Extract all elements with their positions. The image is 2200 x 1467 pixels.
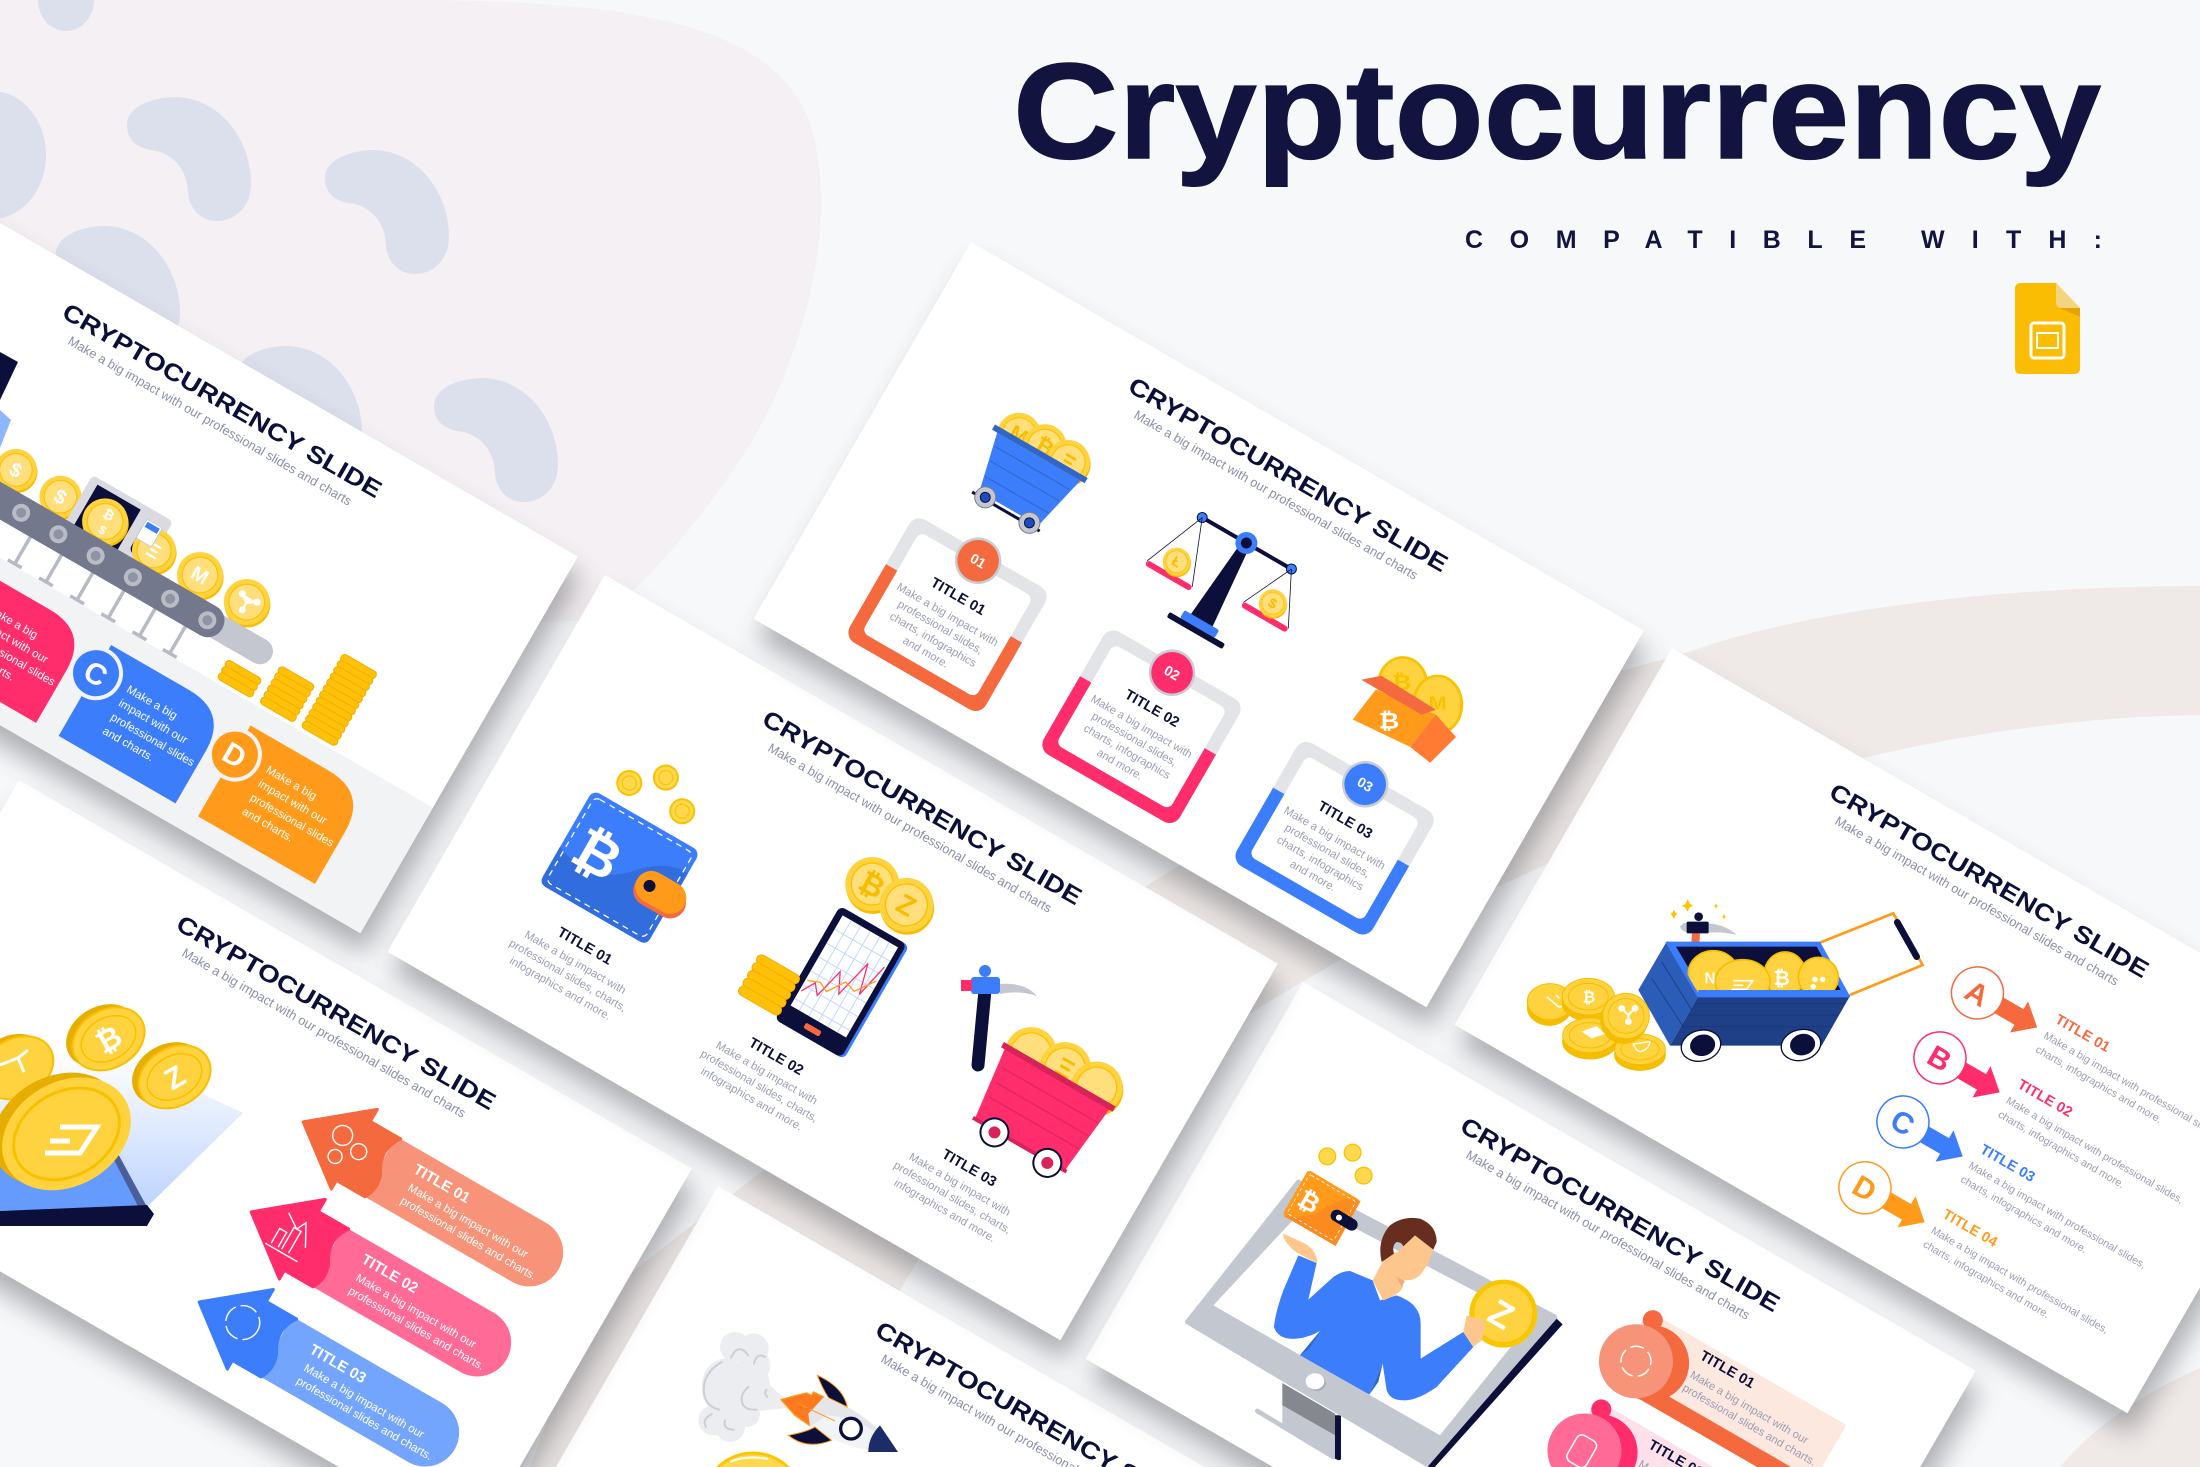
arrow 02: TITLE 02 xyxy=(358,1251,421,1297)
icon: rocket with smoke xyxy=(698,1332,898,1452)
card 03: and more. xyxy=(1288,858,1338,894)
card 02: 02 xyxy=(1161,662,1183,684)
card C: and charts. xyxy=(100,725,156,764)
coin stacks xyxy=(217,605,378,747)
illustration: coins rising from tablet: ₿ xyxy=(90,1020,128,1061)
illustration: wagon with coins: N xyxy=(1704,970,1716,987)
item D: D xyxy=(1847,1169,1882,1209)
text: title 02: Make a big impact with xyxy=(714,1040,819,1107)
text: title 03: TITLE 03 xyxy=(939,1146,999,1191)
slide: arrows (left): Make a big impact with our professional slides and charts xyxy=(179,945,469,1121)
icon: red cart with coins: Ξ xyxy=(1050,1051,1080,1085)
slide: cart and letters (right): CRYPTOCURRENCY SLIDE xyxy=(1824,778,2153,984)
item D: Make a big impact with professional slides, xyxy=(1929,1225,2110,1336)
tab 01 xyxy=(1585,1296,1860,1467)
text: title 02: professional slides, charts, xyxy=(698,1048,820,1125)
text: title 01: infographics and more. xyxy=(507,955,613,1023)
card 02: and more. xyxy=(1094,747,1145,783)
arrow 01: professional slides and charts. xyxy=(398,1195,538,1283)
slide: conveyor (top left): Make a big impact with our professional slides and charts xyxy=(65,333,355,509)
item D: TITLE 04 xyxy=(1940,1207,2000,1251)
card D: D xyxy=(217,736,252,776)
item D: charts, infographics and more. xyxy=(1921,1239,2051,1321)
heading: Cryptocurrency: Cryptocurrency xyxy=(1013,35,2101,187)
tab 02 xyxy=(1534,1385,1808,1467)
illustration: coins rising from tablet: Z xyxy=(159,1059,191,1097)
icon: phone with chart and coins: Z xyxy=(891,888,921,923)
card 03: Make a big impact with xyxy=(1282,805,1387,873)
coins after the machine: M xyxy=(187,562,212,590)
arrow 03 xyxy=(177,1260,479,1467)
tab 01: professional slides and charts. xyxy=(1680,1382,1818,1467)
card D: professional slides xyxy=(248,792,336,850)
item C: charts, infographics and more. xyxy=(1958,1174,2089,1256)
card 03: charts, infographics xyxy=(1274,834,1366,894)
item B: TITLE 02 xyxy=(2015,1077,2075,1121)
item A: charts, infographics and more. xyxy=(2033,1044,2164,1126)
item A: A xyxy=(1959,975,1994,1014)
card 01: professional slides, xyxy=(895,598,985,657)
background wave: bottom right xyxy=(2060,1368,2200,1467)
arrow 02: professional slides and charts. xyxy=(346,1285,486,1373)
icon: blue cart with coins: Ξ xyxy=(1055,448,1080,477)
icon: blue cart with coins xyxy=(956,400,1102,546)
coins after the machine: Ξ xyxy=(142,539,165,564)
icon: wallet: ₿ xyxy=(562,815,633,893)
card 01: TITLE 01 xyxy=(928,575,988,619)
arrow 01 xyxy=(281,1080,583,1307)
exchange machine xyxy=(63,475,173,573)
text: title 02: TITLE 02 xyxy=(746,1035,806,1079)
card C xyxy=(38,633,228,803)
icon: coin peeking at bottom xyxy=(703,1453,803,1467)
icon: balance scale xyxy=(1128,495,1320,673)
card C: C xyxy=(78,655,113,694)
card D xyxy=(177,713,367,884)
subheading: compatible with: COMPATIBLE xyxy=(1465,226,1866,254)
icon: box with coins: ₿ xyxy=(1379,710,1399,734)
icon: Google Slides xyxy=(2015,283,2080,374)
conveyor belt xyxy=(0,407,280,672)
item B xyxy=(1904,1022,2197,1221)
subheading: compatible with: WITH: xyxy=(1921,226,2102,254)
exchange machine: ₿ xyxy=(101,506,117,524)
card B xyxy=(0,564,89,723)
coins before the machine: $ xyxy=(5,458,26,483)
tab 01: TITLE 01 xyxy=(1697,1348,1757,1392)
exchange machine: $ xyxy=(96,522,109,538)
text: title 01: TITLE 01 xyxy=(554,924,615,969)
arrow 03: professional slides and charts. xyxy=(294,1375,434,1463)
icon: blue cart with coins: M xyxy=(1005,420,1033,451)
tab 01: Make a big impact with our xyxy=(1688,1369,1810,1447)
slide: cards (top centre): CRYPTOCURRENCY SLIDE xyxy=(1123,372,1452,578)
subheading: compatible with xyxy=(1465,226,2102,254)
slide: wallet, phone, cart (centre): CRYPTOCURRENCY SLIDE xyxy=(757,705,1086,911)
card 02: TITLE 02 xyxy=(1122,687,1182,731)
text: title 01: professional slides, charts, xyxy=(507,937,628,1014)
slide: person with monitor (bottom right): Make a big impact with our professional slides and charts xyxy=(1463,1147,1753,1323)
card 01: 01 xyxy=(967,550,989,572)
icon: box with coins xyxy=(1353,657,1462,763)
slide: cart and letters (right): Make a big impact with our professional slides and charts xyxy=(1832,813,2122,989)
slide: cards (top centre) xyxy=(746,242,1656,1028)
icon: box with coins: M xyxy=(1429,694,1447,714)
arrow 02: Make a big impact with our xyxy=(354,1272,478,1351)
icon: wallet xyxy=(539,739,743,953)
card C: Make a big xyxy=(124,684,179,722)
icon: pickaxe xyxy=(961,965,1037,1065)
card 01: charts, infographics xyxy=(887,611,978,670)
icon: balance scale: $ xyxy=(1265,594,1280,612)
slide: cards (top centre): Make a big impact with our professional slides and charts xyxy=(1131,407,1421,583)
card C: professional slides xyxy=(108,711,196,769)
card D: impact with our xyxy=(256,778,329,827)
arrow 01: TITLE 01 xyxy=(410,1161,473,1207)
coins after the machine xyxy=(123,518,280,637)
icon: balance scale: Ł xyxy=(1169,553,1185,571)
item A xyxy=(1942,957,2200,1156)
slide: person with monitor (bottom right) xyxy=(1078,982,1988,1467)
background blob: upper left xyxy=(0,0,821,640)
item C: Make a big impact with professional slides, xyxy=(1966,1160,2148,1271)
card 03: 03 xyxy=(1354,773,1376,795)
icon: phone with chart and coins: ₿ xyxy=(853,865,890,906)
arrow 03: Make a big impact with our xyxy=(302,1362,426,1441)
text: title 03: Make a big impact with xyxy=(907,1151,1012,1219)
slide: wallet, phone, cart (centre): Make a big impact with our professional slides and charts xyxy=(765,740,1055,916)
slide: rocket (bottom centre) xyxy=(492,1186,1403,1467)
card 03: professional slides, xyxy=(1283,822,1372,880)
card D: Make a big xyxy=(264,764,318,803)
slide: wallet, phone, cart (centre) xyxy=(380,575,1290,1361)
card 02: charts, infographics xyxy=(1081,723,1172,782)
card 03: TITLE 03 xyxy=(1315,798,1375,842)
slide: cart and letters (right) xyxy=(1446,648,2200,1434)
item C: C xyxy=(1885,1104,1920,1143)
slide: person with monitor (bottom right): CRYPTOCURRENCY SLIDE xyxy=(1455,1112,1784,1318)
card 01: and more. xyxy=(900,635,951,671)
item C: TITLE 03 xyxy=(1977,1142,2037,1186)
card C: impact with our xyxy=(116,698,189,747)
arrow 03: TITLE 03 xyxy=(306,1341,369,1387)
card 02 xyxy=(1038,615,1251,827)
item B: Make a big impact with professional slides, xyxy=(2004,1095,2185,1206)
item C xyxy=(1867,1086,2160,1285)
illustration: monitor, person, wallet: Z xyxy=(1481,1291,1521,1338)
card 02: Make a big impact with xyxy=(1088,693,1194,761)
icon: box with coins: ₿ xyxy=(1392,671,1411,694)
icon: red cart with coins xyxy=(955,1013,1134,1192)
card 01 xyxy=(844,503,1057,715)
item A: TITLE 01 xyxy=(2052,1012,2112,1056)
slide: conveyor (top left) xyxy=(0,168,590,954)
slide: arrows (left) xyxy=(0,780,704,1467)
slide: arrows (left): CRYPTOCURRENCY SLIDE xyxy=(171,910,500,1116)
illustration: wagon with coins: ₿ xyxy=(1583,990,1595,1007)
machine fragment at the left edge xyxy=(0,352,18,448)
card D: and charts. xyxy=(240,806,295,845)
illustration: monitor, person, wallet: ₿ xyxy=(1293,1185,1325,1219)
icon: phone with chart and coins xyxy=(735,829,946,1062)
illustration: coins rising from tablet xyxy=(0,990,243,1226)
illustration: wagon with coins xyxy=(1527,899,1923,1070)
decorative crescents xyxy=(0,0,558,502)
text: title 01: Make a big impact with xyxy=(522,929,628,997)
item B: charts, infographics and more. xyxy=(1996,1109,2126,1191)
card 03 xyxy=(1231,726,1445,939)
slide: conveyor (top left): CRYPTOCURRENCY SLIDE xyxy=(57,298,386,504)
text: title 02 xyxy=(691,1017,838,1138)
card 01: Make a big impact with xyxy=(895,581,1000,649)
item B: B xyxy=(1922,1039,1957,1079)
background wave: diagonal beige band xyxy=(530,586,2200,1467)
card 02: professional slides, xyxy=(1089,710,1179,769)
text: title 02: infographics and more. xyxy=(699,1066,804,1133)
text: title 01 xyxy=(499,906,646,1027)
arrow 02 xyxy=(229,1170,531,1398)
icon: blue cart with coins: ₿ xyxy=(1030,431,1059,462)
text: title 03: professional slides, charts, xyxy=(891,1159,1013,1236)
conveyor legs xyxy=(8,532,193,657)
illustration: monitor, person, wallet xyxy=(1187,1144,1563,1467)
coins before the machine xyxy=(0,441,91,528)
text: title 03: infographics and more. xyxy=(892,1177,997,1245)
text: title 03 xyxy=(884,1128,1031,1249)
illustration: wagon with coins: ₿ xyxy=(1773,968,1790,990)
coins before the machine: $ xyxy=(50,485,70,510)
arrow 01: Make a big impact with our xyxy=(406,1182,530,1261)
item D xyxy=(1829,1152,2122,1351)
